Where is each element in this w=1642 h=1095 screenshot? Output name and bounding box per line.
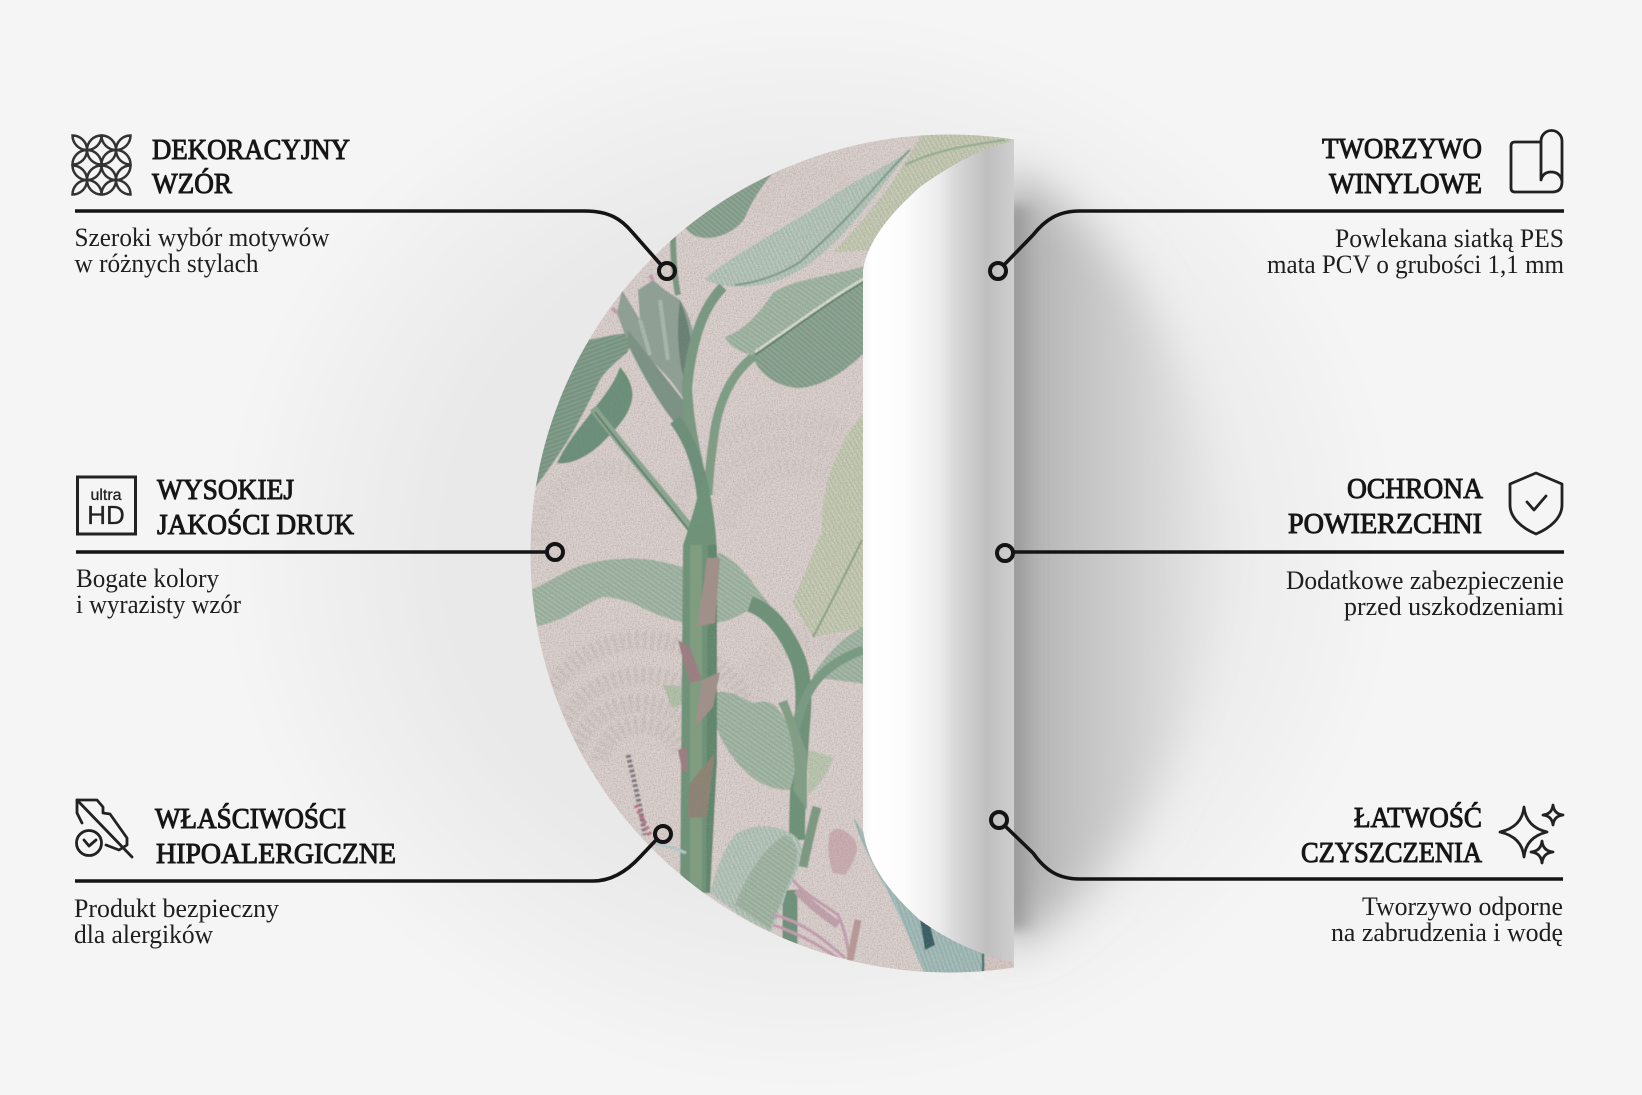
middle right leaf lower — [752, 282, 865, 388]
icon: vinyl roll — [1511, 130, 1562, 192]
flower bud — [616, 280, 694, 398]
right branch — [796, 650, 863, 728]
left petiole — [593, 408, 692, 530]
heading: WINYLOWE — [1329, 169, 1482, 200]
small leaf right of stem — [808, 750, 833, 795]
description: dla alergików — [74, 920, 213, 949]
icon: shield with check — [1510, 473, 1562, 534]
canvas grain — [520, 125, 1020, 985]
description: i wyrazisty wzór — [76, 590, 241, 619]
leader line — [75, 211, 675, 279]
description: na zabrudzenia i wodę — [1331, 918, 1563, 947]
heading: ŁATWOŚĆ — [1354, 803, 1482, 834]
description: Szeroki wybór motywów — [74, 223, 330, 252]
description — [74, 894, 279, 949]
leader line — [991, 812, 1563, 879]
heading — [157, 475, 354, 541]
description: Bogate kolory — [76, 564, 219, 593]
heading: JAKOŚCI DRUK — [157, 510, 354, 541]
heading: DEKORACYJNY — [152, 135, 350, 166]
description: Dodatkowe zabezpieczenie — [1286, 566, 1564, 595]
round botanical wall panel — [520, 125, 1020, 985]
description — [1331, 892, 1563, 947]
upper stems — [687, 287, 723, 487]
big left leaf — [533, 333, 631, 490]
blue-green leaf at bottom — [853, 818, 986, 972]
description: przed uszkodzeniami — [1344, 592, 1564, 621]
heading — [1322, 134, 1482, 200]
small leaf by trunk — [663, 685, 682, 708]
dark second left leaf — [557, 367, 632, 463]
callout: tworzywo winylowe — [990, 130, 1564, 279]
top left leaf — [685, 173, 773, 238]
leader line — [76, 544, 563, 560]
small plume flower — [628, 755, 686, 853]
callout: łatwość czyszczenia — [991, 803, 1563, 947]
panel base colour — [520, 125, 1020, 985]
heading — [152, 135, 350, 200]
heading — [1288, 474, 1484, 540]
small right leaf — [812, 625, 866, 684]
description: Tworzywo odporne — [1362, 892, 1563, 921]
icon: ultra HD: HD — [87, 500, 125, 530]
icon: ultra HD — [78, 477, 136, 534]
trunk — [680, 470, 717, 893]
pink plume — [773, 880, 858, 965]
bottom leaf — [710, 826, 802, 932]
callout: dekoracyjny wzór — [72, 135, 675, 279]
icon: feather with check — [76, 800, 132, 857]
heading: WŁAŚCIWOŚCI — [155, 804, 346, 835]
faded background fronds — [550, 632, 751, 760]
icon: sparkles — [1500, 805, 1563, 863]
central horizontal leaf — [530, 553, 770, 626]
cast shadow of the rolled edge — [1000, 175, 1225, 945]
description — [1286, 566, 1564, 621]
description — [74, 223, 330, 278]
thin upper stem — [673, 232, 678, 295]
leader line — [75, 826, 671, 881]
callout: właściwości hipoalergiczne — [74, 800, 671, 949]
leader line — [990, 211, 1564, 279]
pale large leaf — [705, 147, 913, 287]
icon: ultra HD: ultra — [90, 487, 122, 504]
description — [1267, 224, 1564, 279]
panel artwork — [520, 125, 1020, 985]
heading: OCHRONA — [1347, 474, 1484, 505]
description — [76, 564, 241, 619]
description: mata PCV o grubości 1,1 mm — [1267, 250, 1564, 279]
leader line — [997, 545, 1564, 561]
pale yellow leaf at top — [833, 132, 1016, 252]
right stem — [750, 604, 803, 840]
description: Produkt bezpieczny — [74, 894, 279, 923]
central lower leaf — [715, 692, 797, 790]
heading: WZÓR — [152, 169, 232, 200]
tall light leaf in gap — [792, 410, 866, 637]
icon: decorative pattern — [72, 136, 130, 194]
heading — [155, 804, 396, 870]
middle right leaf upper — [725, 266, 865, 355]
heading: HIPOALERGICZNE — [156, 839, 396, 870]
heading: TWORZYWO — [1322, 134, 1482, 165]
callout: ochrona powierzchni — [997, 473, 1564, 621]
heading: POWIERZCHNI — [1288, 509, 1482, 540]
heading: CZYSZCZENIA — [1301, 838, 1483, 869]
heading — [1301, 803, 1483, 869]
description: w różnych stylach — [74, 249, 258, 278]
heading: WYSOKIEJ — [157, 475, 294, 506]
curled white edge of the panel — [863, 141, 1014, 962]
pink bud — [828, 829, 857, 875]
trunk sheaths — [678, 558, 720, 818]
callout: wysokiej jakości druk — [76, 475, 563, 619]
description: Powlekana siatką PES — [1335, 224, 1564, 253]
